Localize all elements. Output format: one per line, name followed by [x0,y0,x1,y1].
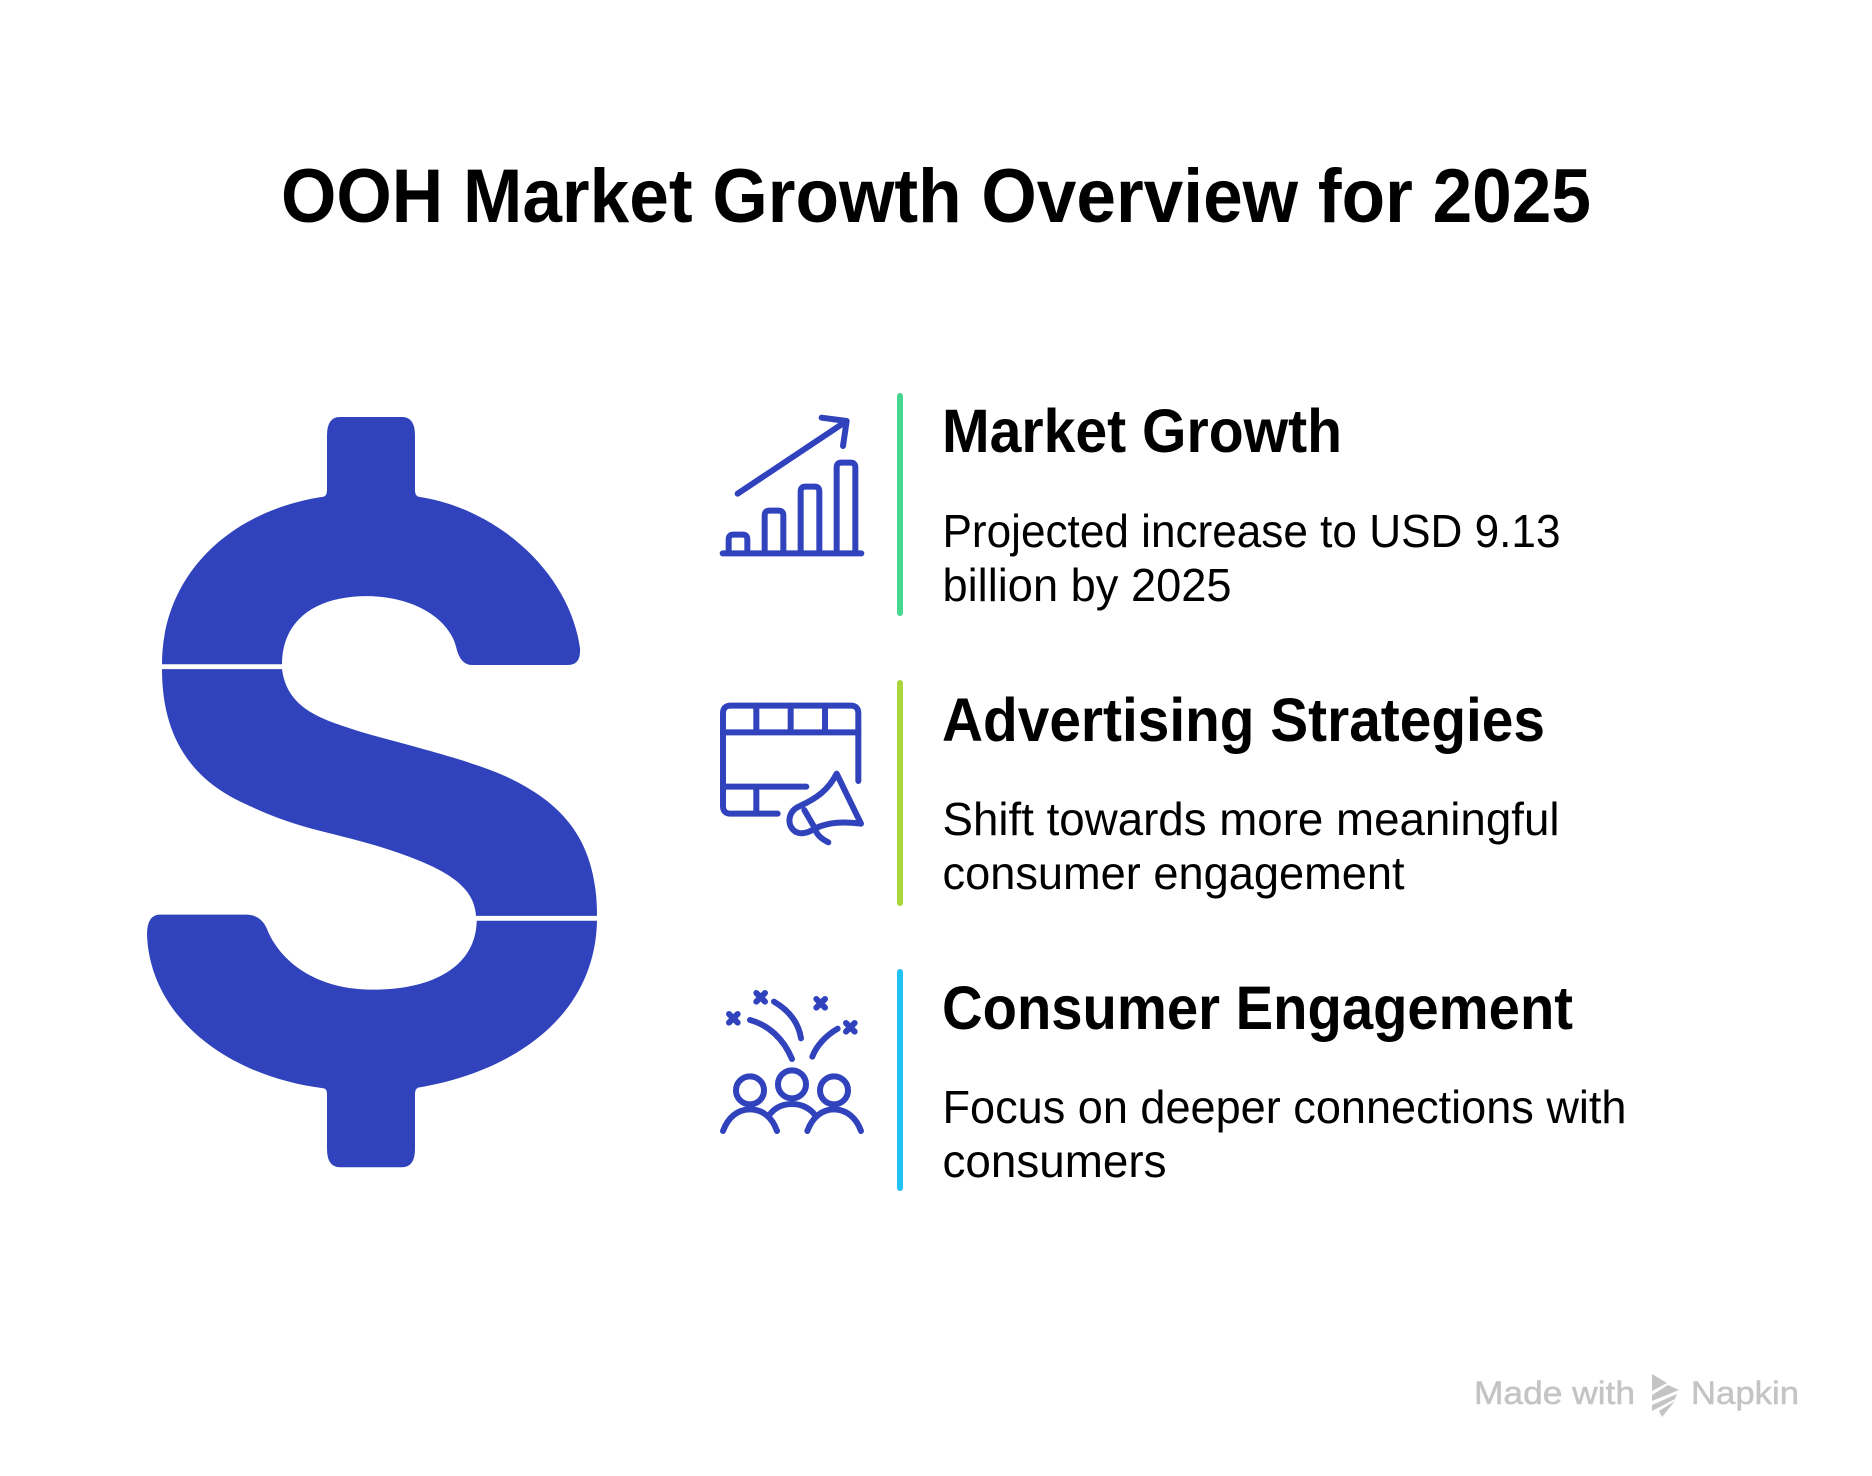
text: market growth description: billion by 2025 [942,559,1232,611]
heading: market growth: Market Growth [942,397,1342,465]
text: napkin: Napkin [1691,1375,1799,1411]
panel: market growth [723,393,1560,616]
divider bar: lime [897,680,903,906]
panel: consumer engagement [723,969,1626,1191]
icon: billboard with megaphone [723,706,861,842]
heading: advertising strategies: Advertising Strategies [942,686,1545,754]
panel: advertising strategies [723,680,1560,906]
divider bar: green [897,393,903,616]
icon: crowd with fireworks [723,993,861,1131]
footer: made with napkin [1474,1374,1799,1417]
text: advertising strategies description: Shift towards more meaningful [942,793,1560,845]
text: market growth description: Projected increase to USD 9.13 [942,505,1560,557]
icon: large dollar sign [147,417,597,1167]
divider bar: cyan [897,969,903,1191]
icon: napkin logo [1652,1374,1679,1417]
text: made with: Made with [1474,1375,1635,1411]
text: consumer engagement description: Focus on deeper connections with [942,1081,1626,1133]
text: consumer engagement description [942,1081,1626,1187]
text: advertising strategies description [942,793,1560,899]
icon: rising bar chart with arrow [723,418,861,553]
text: advertising strategies description: consumer engagement [942,847,1405,899]
text: market growth description [942,505,1560,611]
title: OOH Market Growth Overview for 2025 [281,154,1591,239]
text: consumer engagement description: consumers [942,1135,1166,1187]
heading: consumer engagement: Consumer Engagement [942,974,1573,1042]
